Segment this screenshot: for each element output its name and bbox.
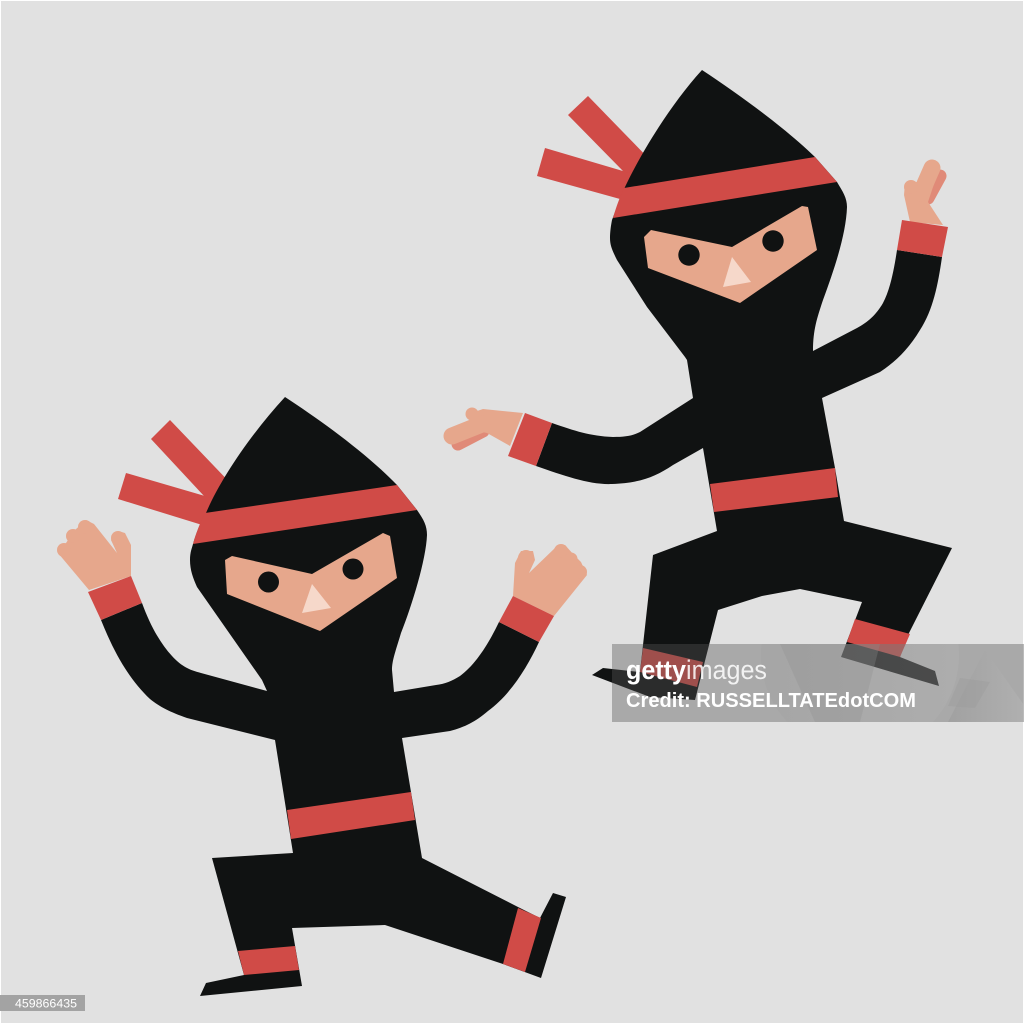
image id tag: 459866435 xyxy=(15,996,77,1010)
eye left xyxy=(258,572,279,592)
getty images logo: gettyimages xyxy=(626,655,767,685)
watermark panel xyxy=(612,644,1024,722)
extended hand cuff xyxy=(508,413,552,466)
watermark geometric shapes xyxy=(780,644,968,722)
body and hood xyxy=(101,397,566,996)
ninja: upper right xyxy=(452,70,952,700)
rear ankle band xyxy=(503,908,541,972)
headband tails xyxy=(118,420,236,530)
eye left xyxy=(678,244,700,266)
rear ankle band xyxy=(847,619,910,657)
face mask opening xyxy=(644,206,817,303)
belt xyxy=(710,468,838,512)
body and hood xyxy=(536,70,952,700)
right hand xyxy=(513,544,587,616)
image id tag xyxy=(0,995,85,1011)
front ankle band xyxy=(640,648,703,687)
headband xyxy=(613,157,837,218)
extended hand xyxy=(452,408,523,446)
nose xyxy=(302,584,331,613)
belt xyxy=(287,792,415,839)
headband xyxy=(193,485,417,544)
credit line: Credit: RUSSELLTATEdotCOM xyxy=(626,690,916,712)
raised hand xyxy=(904,168,943,225)
face mask opening xyxy=(225,533,397,631)
raised hand cuff xyxy=(897,220,948,257)
right cuff xyxy=(499,596,554,642)
nose xyxy=(723,257,751,287)
headband tails xyxy=(537,96,655,205)
ninja: lower left xyxy=(57,397,587,996)
eye right xyxy=(762,230,784,252)
left hand xyxy=(57,520,131,590)
left cuff xyxy=(88,576,142,620)
front ankle band xyxy=(238,946,299,975)
eye right xyxy=(342,558,364,580)
